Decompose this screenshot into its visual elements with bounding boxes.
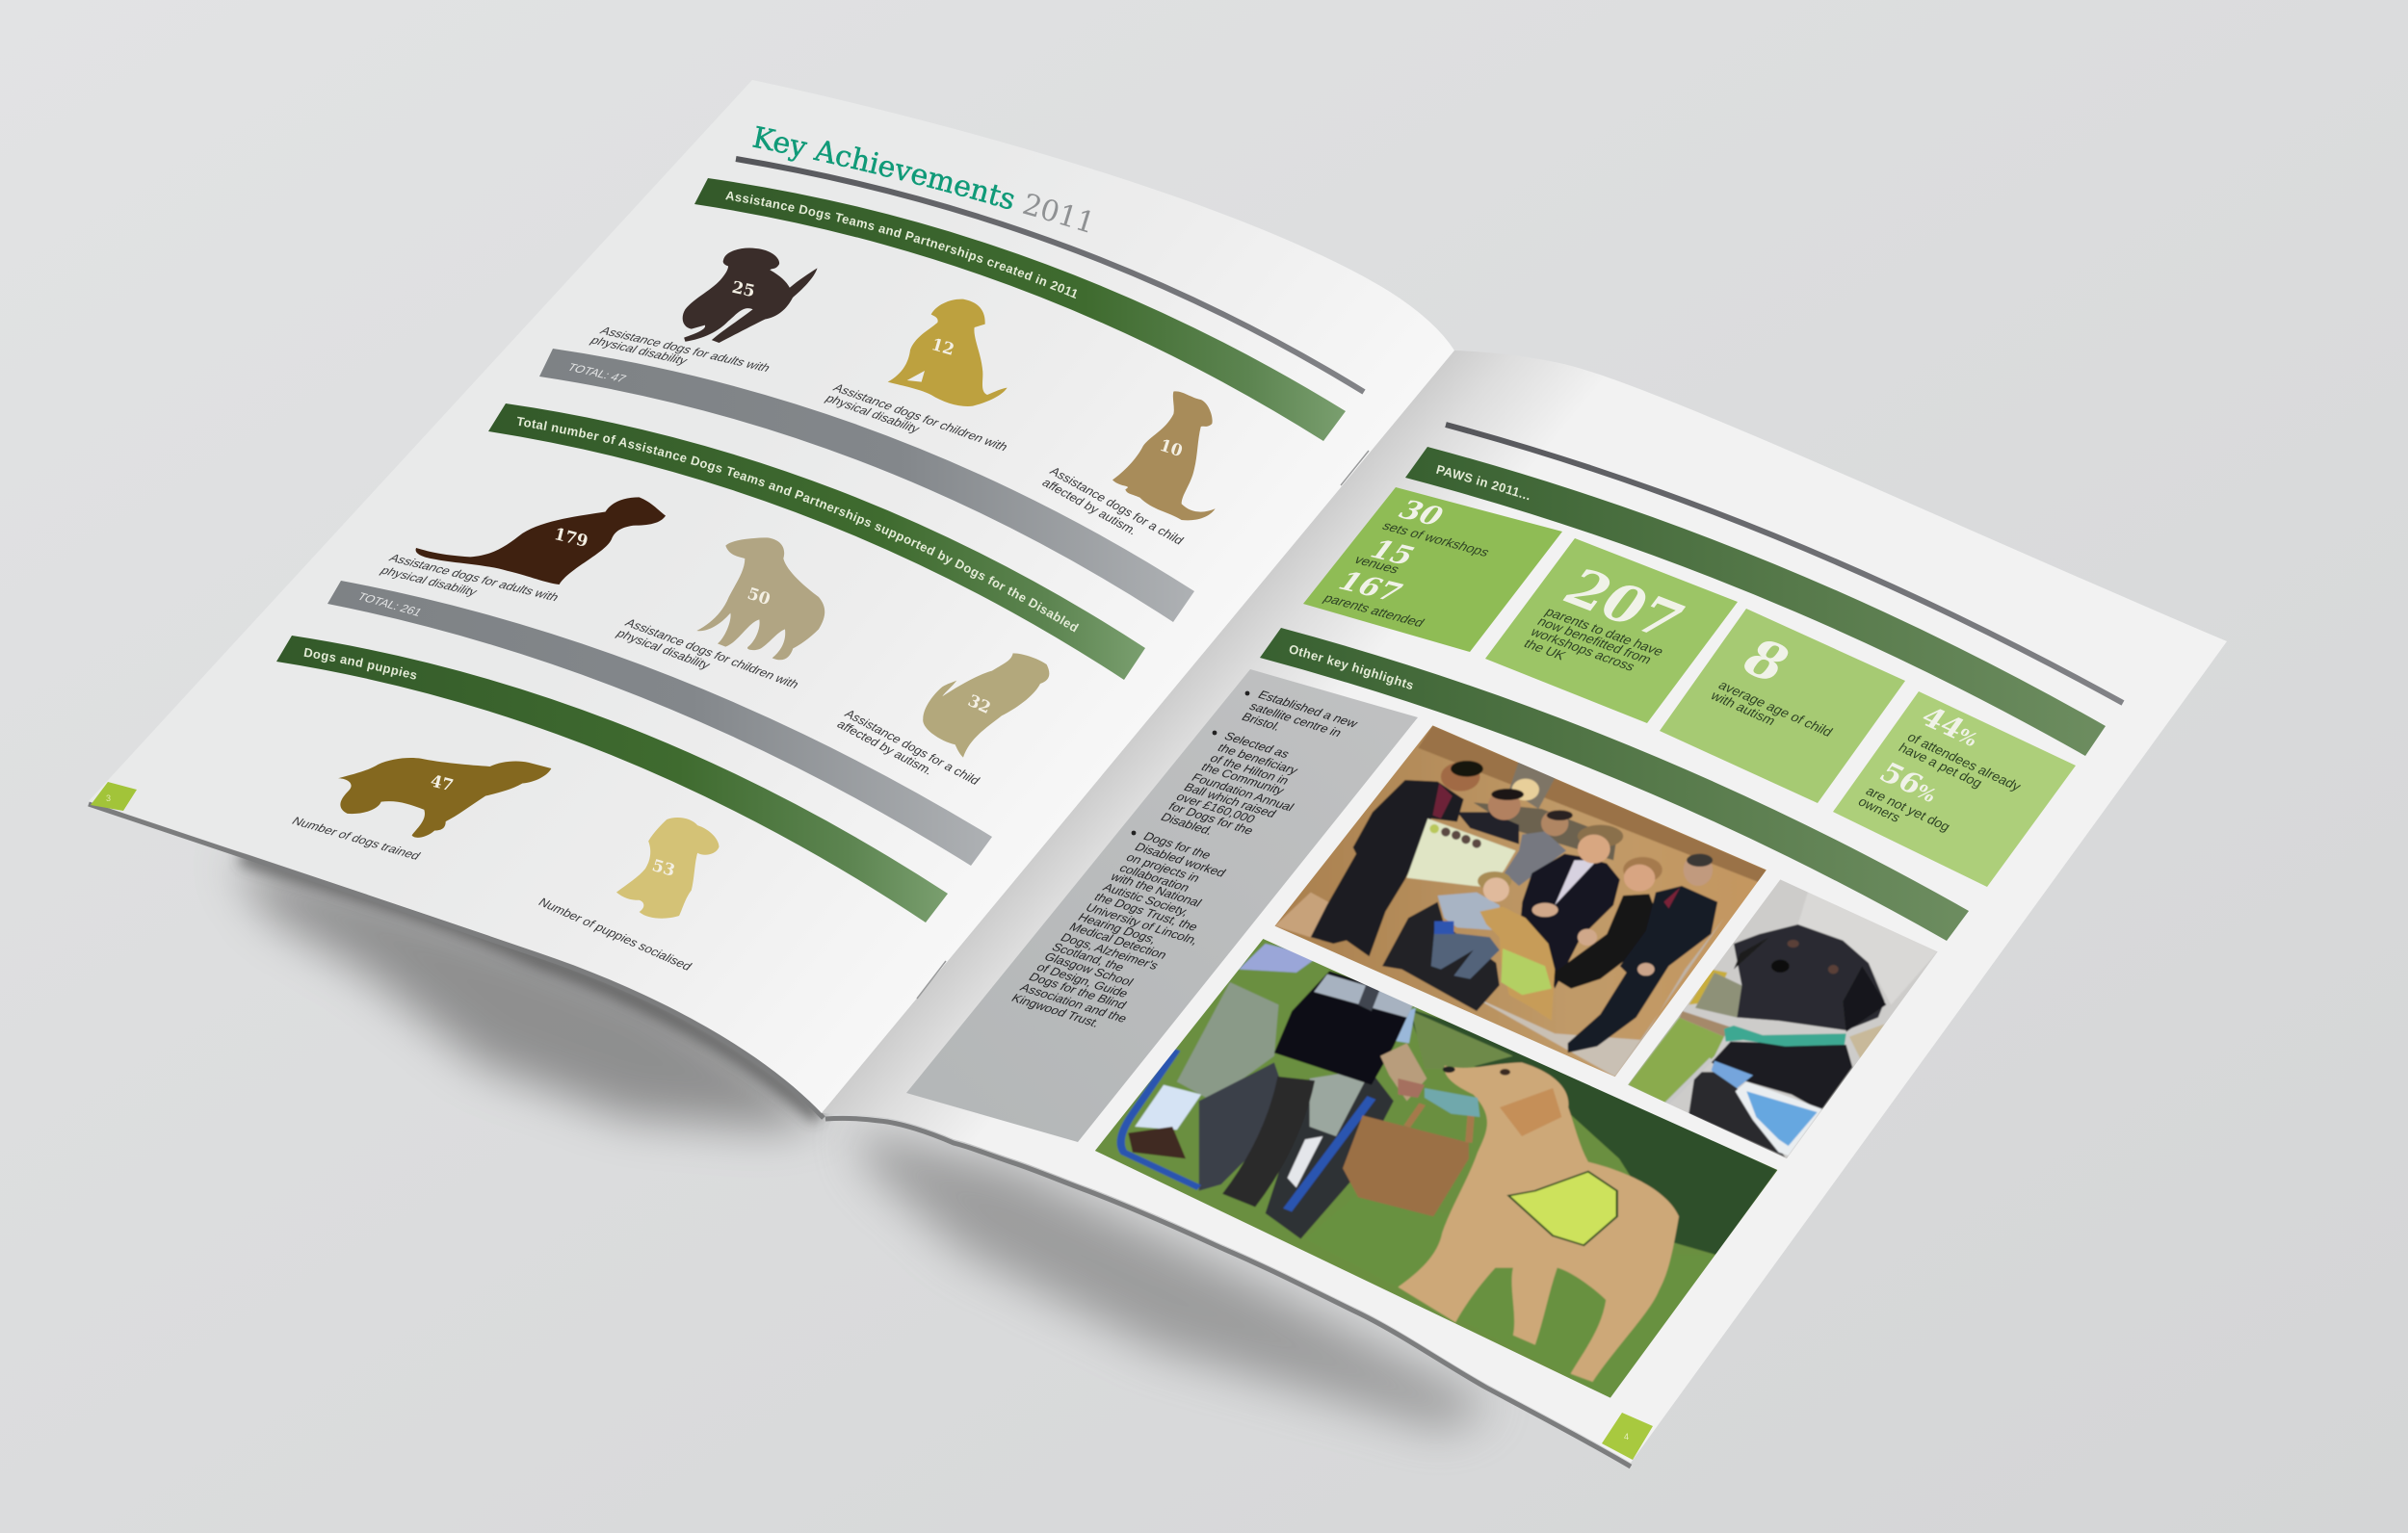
caption: dog 179: Assistance dogs for adults with: [386, 552, 563, 604]
dog: 179 adults physical disability: [416, 497, 666, 585]
highlights bullet list: with the National: [1107, 870, 1205, 909]
dog: 25 adults physical disability: [683, 247, 818, 343]
highlights bullet list: Bristol.: [1239, 710, 1284, 733]
dog: 50 children physical disability: [696, 537, 824, 660]
dog: 10 child autism: [1112, 391, 1216, 520]
label venues: venues: [1351, 553, 1402, 576]
stat box: average age: [1660, 609, 1905, 803]
caption: dog 12: Assistance dogs for children with: [830, 381, 1011, 454]
highlights bullet list: Ball which raised: [1181, 780, 1279, 820]
highlights bullet list: Scotland, the: [1049, 940, 1128, 974]
highlights bullet list: the beneficiary: [1215, 741, 1301, 777]
highlights bullet list: Glasgow School: [1041, 949, 1137, 989]
left page: [89, 80, 1454, 1113]
page thickness edge: [89, 804, 1631, 1467]
highlights bullet list: Established a new: [1255, 688, 1361, 730]
dog: 32 child autism: 32: [965, 691, 993, 718]
section 1 total band: [539, 349, 1194, 622]
label sets of workshops: sets of workshops: [1379, 519, 1493, 559]
caption: dog 10: affected by autism.: [1039, 476, 1140, 537]
label 207: workshops across: [1527, 624, 1638, 673]
label 207: now benefitted from: [1534, 614, 1655, 666]
section 1 total band: TOTAL: 47: [564, 361, 629, 385]
highlights bullet list: [1008, 688, 1361, 1029]
dog: 12 children physical disability: 12: [929, 335, 956, 360]
stat 56%: 56%: [1872, 757, 1946, 809]
section 3 banner: Dogs and puppies: [304, 647, 416, 680]
other key highlights banner: [1260, 628, 1969, 941]
right page sheet: [822, 351, 2227, 1463]
stat 30: 30: [1391, 495, 1451, 532]
dog: 53 puppies socialised: [616, 818, 720, 919]
caption: dog 50: Assistance dogs for children with: [622, 616, 802, 690]
caption: dog 32: Assistance dogs for a child: [842, 707, 983, 788]
photo: group with cheque: [1275, 726, 1767, 1077]
highlights bullet list: University of Lincoln,: [1083, 900, 1202, 947]
stat 8: 8: [1730, 628, 1802, 693]
stat 167: 167: [1330, 566, 1409, 608]
highlights bullet list: Dogs for the: [1140, 829, 1215, 862]
label 207: the UK: [1521, 637, 1570, 663]
other key highlights banner: Other key highlights: [1289, 645, 1413, 689]
dog: 32 child autism: [923, 653, 1049, 758]
caption: dog 25: physical disability: [588, 334, 692, 367]
section 1 banner: Assistance Dogs Teams and Partnerships created in 2011: [725, 191, 1077, 299]
dog: 179 adults physical disability: 179: [552, 525, 589, 552]
stat 207: 207: [1552, 559, 1696, 651]
page number 4: 4: [1624, 1432, 1629, 1442]
highlights bullet list: Foundation Annual: [1189, 770, 1297, 814]
section 3 banner: [276, 636, 948, 922]
page number 4: [1602, 1413, 1653, 1460]
section 2 banner: [488, 403, 1145, 680]
label average age: average age of child: [1715, 678, 1836, 740]
caption: dog 25: Assistance dogs for adults with: [597, 325, 773, 374]
page number 3: 3: [106, 793, 111, 803]
label 207: parents to date have: [1542, 605, 1667, 659]
page number 3: [91, 782, 137, 811]
PAWS banner: [1405, 447, 2106, 756]
dog: 53 puppies socialised: 53: [650, 856, 677, 881]
stat box: pet dog: [1833, 691, 2076, 887]
highlights bullet list: Dogs for the Blind: [1026, 970, 1130, 1011]
highlights bullet list: Kingwood Trust.: [1008, 991, 1103, 1029]
highlights bullet list: of the Hilton in: [1207, 751, 1292, 787]
stat box: workshops: [1303, 487, 1562, 652]
highlights bullet list: Disabled.: [1158, 810, 1217, 838]
highlights bullet list: collaboration: [1116, 861, 1193, 895]
highlights bullet list: of Design, Guide: [1034, 960, 1132, 1000]
caption: dog 32: affected by autism.: [834, 717, 936, 777]
highlights bullet list: for Dogs for the: [1165, 799, 1257, 837]
section 2 total band: [327, 581, 992, 866]
label 56%: owners: [1855, 793, 1903, 825]
caption: dog 179: physical disability: [378, 564, 481, 598]
label 44%: of attendees already: [1904, 729, 2024, 793]
title rule: [736, 159, 1364, 392]
title: Key Achievements 2011: Key Achievements 2011: [752, 125, 1090, 233]
highlights bullet list: over £160,000: [1173, 790, 1258, 825]
caption: dog 50: physical disability: [614, 627, 714, 672]
stat 15: 15: [1362, 534, 1422, 571]
PAWS banner: PAWS in 2011...: [1436, 464, 1530, 501]
highlights bullet list: Autistic Society,: [1100, 880, 1192, 919]
section 2 banner: Total number of Assistance Dogs Teams and Partnerships supported by Dogs for the Disabled: [517, 416, 1079, 632]
top rule: [1446, 425, 2123, 703]
grey highlights panel: [906, 669, 1418, 1142]
highlights bullet list: Hearing Dogs,: [1075, 910, 1160, 946]
label average age: with autism: [1707, 688, 1779, 728]
photo: black labrador: [1628, 880, 1938, 1158]
highlights bullet list: Association and the: [1017, 980, 1130, 1025]
highlights bullet list: Selected as: [1221, 729, 1293, 761]
dog: 12 children physical disability: [888, 299, 1008, 406]
dog: 10 child autism: 10: [1157, 436, 1185, 461]
dog: 47 dogs trained: 47: [429, 771, 456, 796]
shadow under brochure: [231, 857, 1493, 1430]
caption: dog 10: Assistance dogs for a child: [1047, 464, 1187, 547]
stat 44%: 44%: [1914, 701, 1987, 753]
label 44%: have a pet dog: [1896, 740, 1985, 791]
section 2 total band: TOTAL: 261: [354, 590, 425, 618]
highlights bullet list: Dogs, Alzheimer's: [1058, 930, 1163, 973]
label 56%: are not yet dog: [1863, 783, 1953, 834]
highlights bullet list: Disabled worked: [1132, 840, 1229, 879]
caption: dog 12: physical disability: [823, 392, 924, 435]
highlights bullet list: on projects in: [1123, 850, 1203, 885]
highlights bullet list: the Dogs Trust, the: [1091, 890, 1201, 933]
highlights bullet list: satellite centre in: [1246, 699, 1345, 740]
caption: dog 47: Number of dogs trained: [289, 815, 424, 862]
dog: 25 adults physical disability: 25: [730, 278, 756, 301]
dog: 47 dogs trained: [338, 758, 551, 838]
photo: golden retriever with basket: [1088, 934, 1782, 1406]
left page sheet: [89, 80, 1454, 1113]
caption: dog 53: Number of puppies socialised: [536, 896, 694, 973]
label 207: [1521, 605, 1667, 673]
right page: [822, 351, 2227, 1463]
section 1 banner: [694, 178, 1346, 441]
highlights bullet list: the Community: [1198, 760, 1288, 797]
stat box: 207 parents: [1485, 538, 1738, 723]
dog: 50 children physical disability: 50: [745, 585, 772, 610]
label parents attended: parents attended: [1321, 591, 1427, 630]
highlights bullet list: Medical Detection: [1066, 920, 1170, 961]
spine staple marks: [917, 451, 1369, 999]
